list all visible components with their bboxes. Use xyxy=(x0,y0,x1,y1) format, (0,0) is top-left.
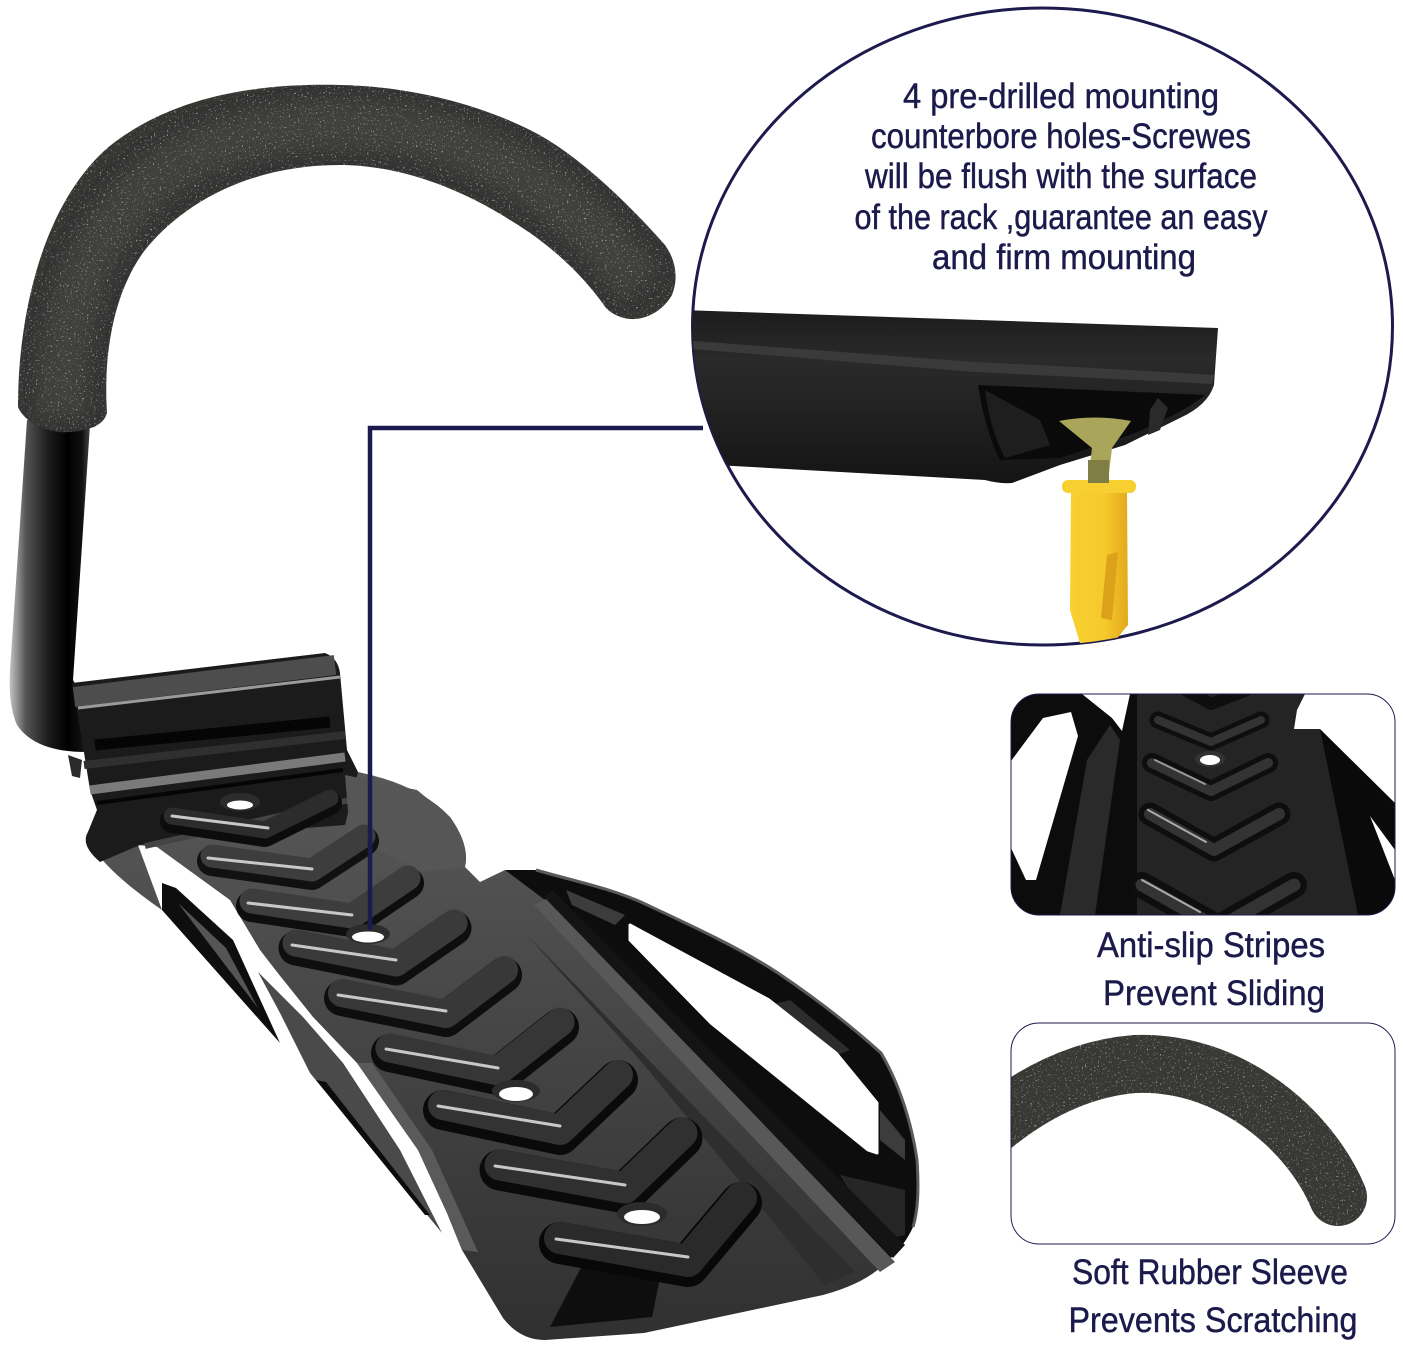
chevron ridges xyxy=(172,798,741,1266)
callout circle: counterbore holes xyxy=(680,8,1392,650)
callout text: of the rack ,guarantee an easy xyxy=(854,198,1268,237)
callout leader line xyxy=(370,428,703,930)
caption: soft rubber sleeve xyxy=(1068,1253,1358,1340)
flange slot xyxy=(630,925,877,1153)
caption: anti-slip stripes: Prevent Sliding xyxy=(1103,974,1325,1013)
base plate xyxy=(88,772,880,1340)
callout text: counterbore holes-Screwes xyxy=(871,117,1251,156)
flange reflections xyxy=(566,890,905,1240)
panel chevrons xyxy=(1142,690,1294,928)
small bolt xyxy=(68,755,82,778)
rubber sleeve xyxy=(18,85,676,432)
hook assembly illustration xyxy=(10,85,918,1340)
left side flange xyxy=(162,883,280,1043)
sleeve close-up xyxy=(990,1064,1338,1197)
chevron highlights xyxy=(172,816,688,1257)
caption: anti-slip stripes xyxy=(1097,926,1325,1013)
white slot shapes xyxy=(1011,712,1078,880)
disc lobe xyxy=(345,775,466,872)
caption: anti-slip stripes: Anti-slip Stripes xyxy=(1097,926,1325,965)
right side flange xyxy=(505,870,918,1270)
callout text xyxy=(854,77,1268,277)
screw xyxy=(1059,418,1131,483)
panel: soft rubber sleeve xyxy=(990,1023,1395,1244)
mounting bracket xyxy=(72,653,358,862)
plate left sheen xyxy=(357,1063,478,1252)
panel: anti-slip stripes xyxy=(1011,690,1395,928)
bracket highlights xyxy=(74,665,350,846)
mounting holes xyxy=(220,793,667,1226)
counterbore cross-section xyxy=(680,310,1218,650)
lower wing flange xyxy=(258,972,442,1233)
callout text: 4 pre-drilled mounting xyxy=(903,77,1219,116)
caption: soft rubber sleeve: Soft Rubber Sleeve xyxy=(1072,1253,1348,1292)
plate shadow xyxy=(550,1260,661,1327)
center plate xyxy=(1137,694,1360,915)
callout text: and firm mounting xyxy=(932,238,1196,277)
callout text: will be flush with the surface xyxy=(864,157,1257,196)
metal pipe xyxy=(10,420,90,752)
yellow wall plug xyxy=(1062,480,1136,650)
caption: soft rubber sleeve: Prevents Scratching xyxy=(1068,1301,1358,1340)
plate diagonal groove xyxy=(525,933,855,1285)
